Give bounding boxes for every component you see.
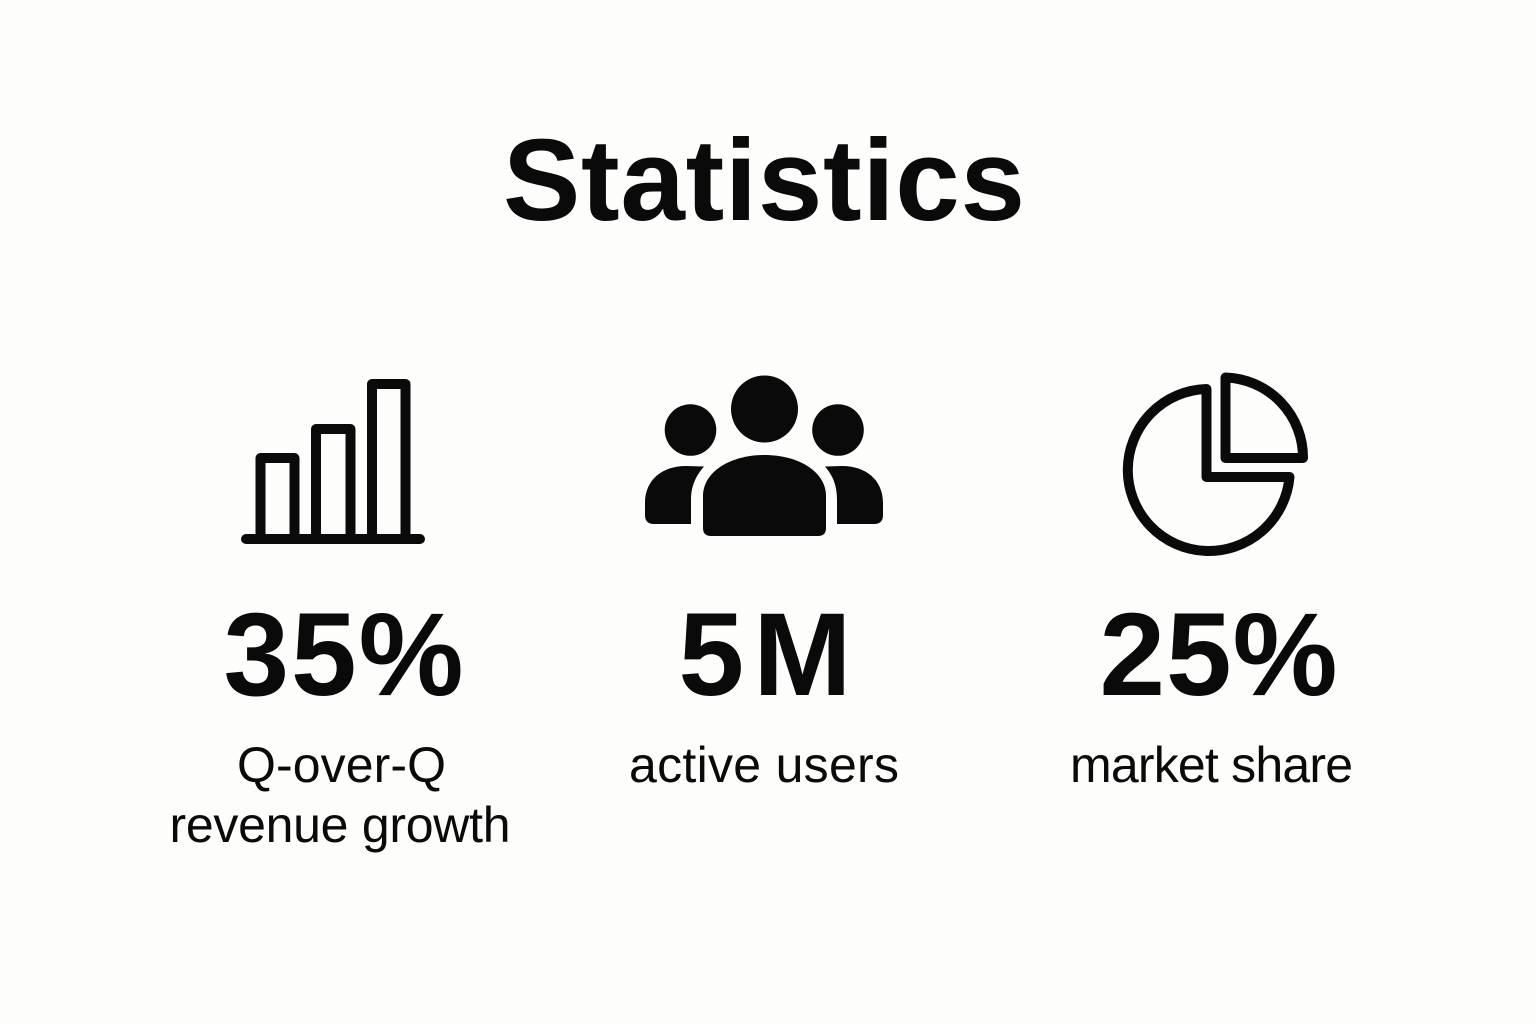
panel: active users bbox=[629, 376, 899, 793]
icon: group of people bbox=[645, 376, 883, 536]
label: Q-over-Q revenue growth bbox=[170, 737, 510, 853]
icon: bar chart bbox=[246, 384, 420, 539]
label: Q-over-Q revenue growth: revenue growth bbox=[170, 797, 510, 853]
label: market share: market share bbox=[1070, 737, 1353, 793]
label: Q-over-Q revenue growth: Q-over-Q bbox=[237, 737, 446, 793]
panel: market share bbox=[1070, 378, 1353, 793]
icon: pie chart bbox=[1128, 378, 1303, 551]
stat: 5M: 5M bbox=[678, 589, 852, 721]
title: Statistics bbox=[503, 115, 1025, 245]
label: active users: active users bbox=[629, 737, 899, 793]
panel: revenue growth bbox=[170, 384, 510, 853]
stat: 25%: 25% bbox=[1100, 589, 1338, 721]
stat: 35%: 35% bbox=[224, 589, 464, 721]
